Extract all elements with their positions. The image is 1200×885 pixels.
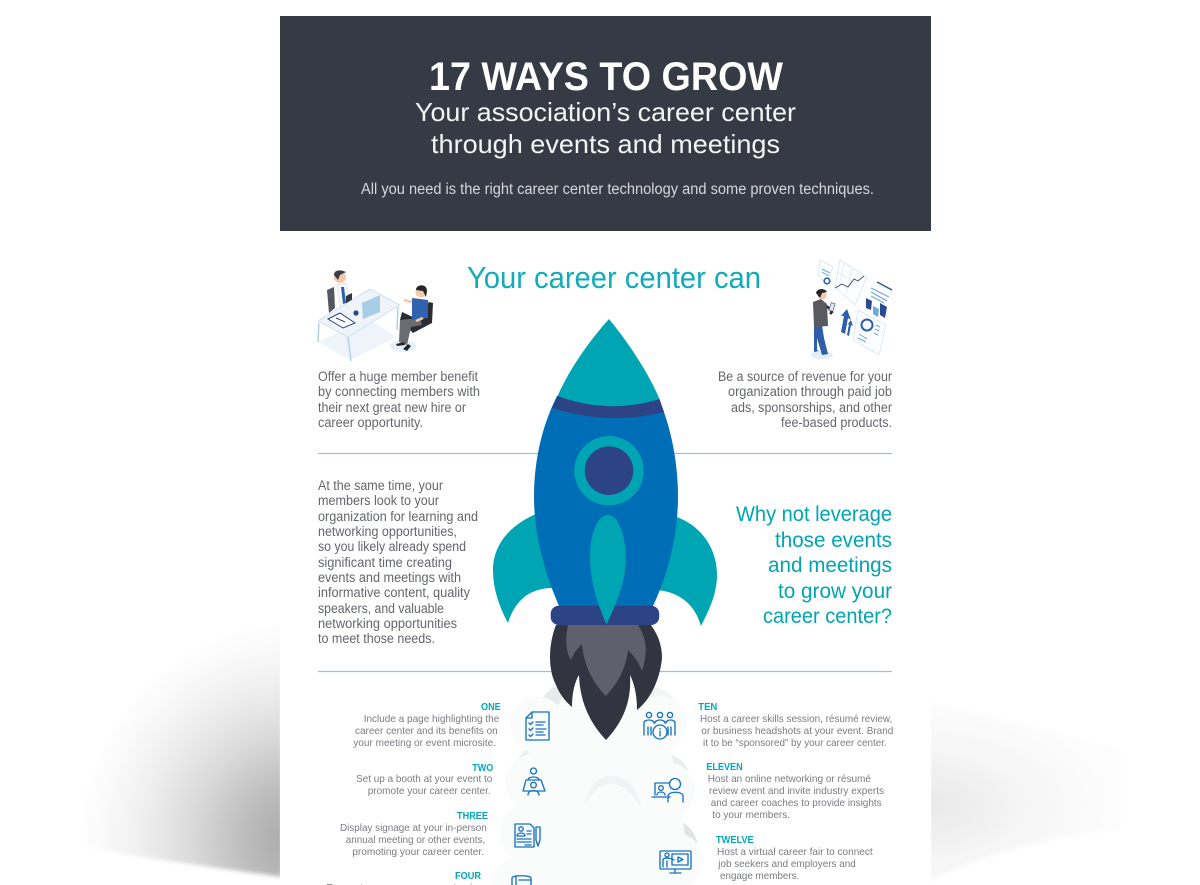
item three: annual meeting or other events,: [346, 834, 485, 846]
item three: [340, 810, 488, 858]
item twelve: Host a virtual career fair to connect: [717, 846, 873, 858]
callout: why not leverage: career center?: [763, 605, 892, 628]
item twelve: job seekers and employers and: [717, 858, 856, 870]
page shadow: left: [80, 622, 282, 877]
item four: [326, 870, 481, 885]
infographic page: [280, 16, 931, 885]
icon: checklist: [526, 712, 549, 740]
illustration: man with data charts: [811, 260, 892, 359]
rocket fins: [493, 514, 717, 626]
item eleven: ELEVEN: [706, 761, 743, 773]
text: learning and networking: members look to your: [318, 493, 439, 508]
item two: TWO: [472, 762, 493, 774]
text: revenue source: organization through paid job: [728, 384, 892, 399]
title: 17 WAYS TO GROW: [429, 55, 783, 99]
section heading: Your career center can: [467, 260, 761, 295]
text: member benefit: Offer a huge member benefit: [318, 369, 478, 384]
icon: resume and pen: [515, 824, 540, 847]
item one: Include a page highlighting the: [364, 713, 499, 725]
callout: why not leverage: [736, 503, 892, 628]
item ten: TEN: [698, 701, 717, 713]
item ten: [698, 701, 893, 749]
item eleven: to your members.: [712, 809, 790, 821]
text: learning and networking: events and meetings with: [318, 570, 461, 585]
text: learning and networking: [318, 478, 478, 646]
text: member benefit: their next great new hire or: [318, 400, 466, 415]
item three: promoting your career center.: [352, 846, 484, 858]
text: revenue source: ads, sponsorships, and other: [731, 400, 892, 415]
item two: [356, 762, 493, 797]
text: learning and networking: informative content, quality: [318, 585, 470, 600]
smoke cloud: [493, 686, 703, 885]
rocket nose: [558, 319, 660, 406]
text: learning and networking: speakers, and valuable: [318, 601, 444, 616]
text: learning and networking: At the same time, your: [318, 478, 443, 493]
item three: Display signage at your in-person: [340, 822, 487, 834]
item four: FOUR: [455, 870, 481, 882]
header tagline: All you need is the right career center technology and some proven techniques.: [361, 181, 874, 198]
page shadow: right: [929, 702, 1121, 882]
rocket body: [534, 396, 678, 608]
item three: THREE: [457, 810, 488, 822]
callout: why not leverage: to grow your: [778, 580, 892, 603]
text: learning and networking: so you likely already spend: [318, 539, 466, 554]
callout: why not leverage: Why not leverage: [736, 503, 892, 526]
illustration: office meeting at desk: [318, 270, 433, 361]
icon: team with info badge: [644, 712, 675, 739]
header panel: [280, 16, 931, 231]
text: learning and networking: to meet those needs.: [318, 631, 435, 646]
text: learning and networking: networking opportunities: [318, 616, 457, 631]
subtitle line one: Your association’s career center: [415, 97, 796, 127]
rocket collar: [551, 606, 659, 625]
item ten: it to be “sponsored” by your career center.: [703, 737, 887, 749]
item one: career center and its benefits on: [355, 725, 498, 737]
text: learning and networking: significant time creating: [318, 555, 452, 570]
item one: ONE: [481, 701, 501, 713]
text: learning and networking: networking opportunities,: [318, 524, 457, 539]
rocket flame: [550, 625, 662, 740]
callout: why not leverage: those events: [775, 529, 892, 552]
icon: brochure: [512, 876, 531, 885]
icon: booth meeting: [523, 768, 545, 795]
icon: virtual fair monitor: [660, 851, 691, 873]
item two: promote your career center.: [368, 785, 491, 797]
item eleven: [706, 761, 884, 821]
icon: online presenter: [652, 778, 683, 802]
text: member benefit: by connecting members with: [318, 384, 480, 399]
item twelve: TWELVE: [716, 834, 754, 846]
text: member benefit: career opportunity.: [318, 415, 423, 430]
item eleven: Host an online networking or résumé: [708, 773, 871, 785]
text: learning and networking: organization for learning and: [318, 509, 478, 524]
item one: your meeting or event microsite.: [353, 737, 496, 749]
rocket porthole: [574, 436, 644, 505]
text: member benefit: [318, 369, 480, 430]
rocket band: [552, 396, 664, 418]
rocket: [493, 319, 717, 740]
item twelve: engage members.: [720, 870, 799, 882]
item eleven: review event and invite industry experts: [709, 785, 884, 797]
callout: why not leverage: and meetings: [768, 554, 892, 577]
item one: [353, 701, 501, 749]
subtitle line two: through events and meetings: [431, 129, 780, 159]
rocket center fin: [590, 515, 626, 624]
text: revenue source: fee-based products.: [781, 415, 892, 430]
item eleven: and career coaches to provide insights: [711, 797, 882, 809]
item two: Set up a booth at your event to: [356, 773, 492, 785]
text: revenue source: Be a source of revenue for your: [718, 369, 892, 384]
item ten: Host a career skills session, résumé review,: [700, 713, 892, 725]
item ten: or business headshots at your event. Brand: [701, 725, 893, 737]
text: revenue source: [718, 369, 892, 430]
item twelve: [716, 834, 873, 882]
